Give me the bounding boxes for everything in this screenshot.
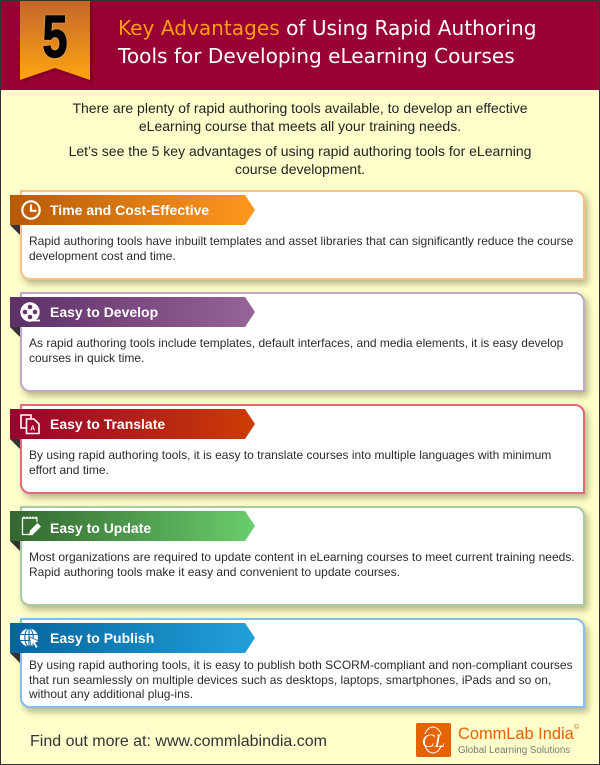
card 2 ribbon	[10, 297, 255, 327]
logo square: CL	[422, 731, 445, 752]
card 5 ribbon: Easy to Publish	[50, 630, 154, 646]
panel: time and cost-effective	[20, 190, 585, 280]
ribbon badge with number 5: 5	[42, 4, 68, 70]
header band	[0, 0, 600, 90]
card 4 fold	[10, 541, 20, 551]
ribbon badge with number 5	[20, 1, 93, 83]
card 5 ribbon	[10, 623, 255, 653]
card 1 text	[29, 234, 573, 262]
card 4 text	[29, 550, 575, 578]
card 2 text: As rapid authoring tools include templates, default interfaces, and media elements, it is easy develop	[29, 336, 563, 350]
card 4 text: Rapid authoring tools make it easy and convenient to update courses.	[29, 564, 400, 578]
intro paragraph 1: There are plenty of rapid authoring tools available, to develop an effective	[72, 100, 528, 116]
card 4 text: Most organizations are required to update content in eLearning courses to meet current training needs.	[29, 550, 575, 564]
footer link text: Find out more at: www.commlabindia.com	[30, 733, 327, 750]
logo square	[416, 723, 451, 757]
card 3 fold	[10, 439, 20, 449]
card 5 text	[29, 658, 573, 701]
icon: globe and cursor	[20, 628, 38, 648]
card 2 text: courses in quick time.	[29, 350, 144, 364]
card 2 text	[29, 336, 563, 364]
logo copyright mark: ©	[574, 724, 579, 731]
logo: CommLab India	[416, 723, 580, 757]
card 5 text: without any additional plug-ins.	[29, 687, 193, 701]
panel: easy to publish	[20, 618, 585, 708]
panel: easy to translate	[20, 404, 585, 494]
card 3 text	[29, 448, 551, 476]
card 3 ribbon	[10, 409, 255, 439]
panel: easy to update	[20, 506, 585, 606]
icon: translate documents	[20, 414, 40, 434]
intro paragraph 1: eLearning course that meets all your training needs.	[139, 118, 461, 134]
card 3 text: By using rapid authoring tools, it is easy to translate courses into multiple languages with minimum	[29, 448, 551, 462]
icon: clock	[21, 200, 41, 220]
icon: translate documents: A	[30, 426, 35, 432]
card 1 fold	[10, 225, 20, 235]
title line 1: Key Advantages of Using Rapid Authoring	[118, 16, 537, 40]
card 2 ribbon: Easy to Develop	[50, 304, 158, 320]
icon: film reel	[20, 302, 40, 322]
card 3 text: effort and time.	[29, 462, 109, 476]
card 5 text: that run seamlessly on multiple devices such as desktops, laptops, smartphones, iPads and so on,	[29, 672, 551, 686]
card 1 text: development cost and time.	[29, 248, 176, 262]
card 1 ribbon: Time and Cost-Effective	[50, 202, 209, 218]
card 5 text: By using rapid authoring tools, it is easy to publish both SCORM-compliant and non-compliant courses	[29, 658, 573, 672]
panel: easy to develop	[20, 292, 585, 392]
card 3 ribbon: Easy to Translate	[50, 416, 165, 432]
intro paragraph 2	[69, 143, 531, 177]
logo name: CommLab India	[458, 725, 574, 743]
card 1 ribbon	[10, 195, 255, 225]
logo tagline: Global Learning Solutions	[458, 745, 570, 756]
intro paragraph 2: Let’s see the 5 key advantages of using rapid authoring tools for eLearning	[69, 143, 531, 159]
card 4 ribbon	[10, 511, 255, 541]
card 5 fold	[10, 653, 20, 663]
title line 2: Tools for Developing eLearning Courses	[118, 44, 515, 68]
intro paragraph 1	[72, 100, 528, 134]
card 4 ribbon: Easy to Update	[50, 520, 151, 536]
card 1 text: Rapid authoring tools have inbuilt templates and asset libraries that can significantly reduce the course	[29, 234, 573, 248]
intro paragraph 2: course development.	[235, 160, 365, 176]
card 2 fold	[10, 327, 20, 337]
icon: notepad and pencil	[22, 516, 41, 536]
